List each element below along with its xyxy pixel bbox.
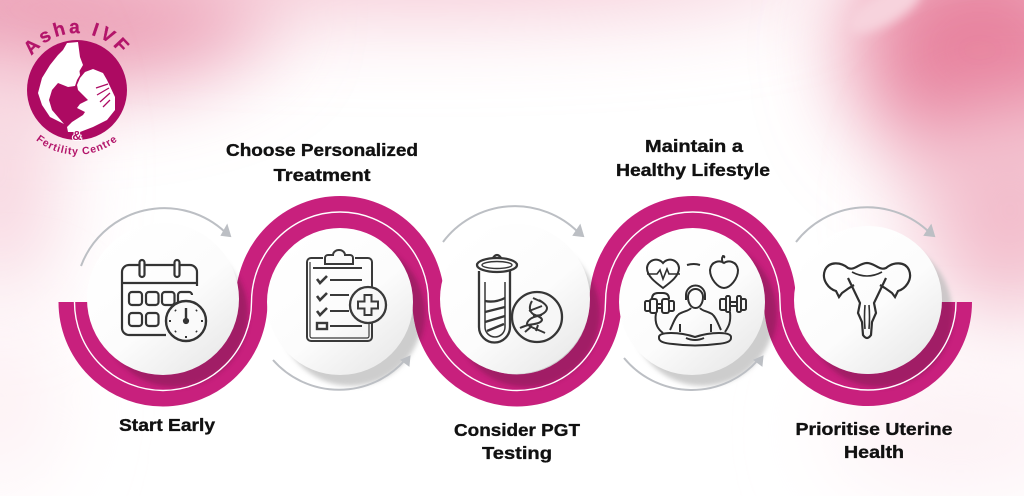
heading: maintain a healthy lifestyle: Maintain a <box>645 136 743 156</box>
heading: choose personalized treatment: Treatment <box>274 165 371 185</box>
heading: maintain a healthy lifestyle: Healthy Lifestyle <box>616 160 770 180</box>
icon: wellness person, heart, apple, dumbbells <box>645 256 746 346</box>
arrow: step 2 <box>273 356 410 390</box>
heading: choose personalized treatment <box>226 140 418 185</box>
logo baby silhouette <box>67 69 115 132</box>
step 4 circle: healthy lifestyle <box>619 229 765 375</box>
logo: Asha IVF Fertility Centre: Asha IVF <box>26 22 130 56</box>
heading: start early: Start Early <box>119 415 215 435</box>
step 5 circle: uterine health <box>794 226 942 374</box>
heading: consider PGT testing <box>454 420 580 463</box>
wave ribbon <box>74 212 956 390</box>
logo: Asha IVF Fertility Centre: & <box>72 128 82 143</box>
heading: consider PGT testing: Testing <box>482 443 552 463</box>
arrow: step 5 <box>796 207 934 242</box>
icon: calendar with clock <box>122 260 206 341</box>
step 2 circle: personalized treatment <box>267 229 413 375</box>
heading: prioritise uterine health: Prioritise Uterine <box>796 419 953 439</box>
icon: clipboard with plus <box>307 250 386 341</box>
step 1 circle: start early <box>87 223 239 375</box>
icon: test tube and DNA <box>477 255 562 342</box>
circle drop shadows on background <box>101 240 952 386</box>
logo mother silhouette <box>38 42 83 124</box>
arrow: step 1 <box>81 208 230 266</box>
arrow: step 4 <box>624 356 763 390</box>
heading: choose personalized treatment: Choose Personalized <box>226 140 418 160</box>
arrow: step 3 <box>443 206 583 242</box>
heading: prioritise uterine health: Health <box>844 442 904 462</box>
logo: Asha IVF Fertility Centre: Fertility Centre <box>36 134 116 157</box>
heading: consider PGT testing: Consider PGT <box>454 420 580 440</box>
logo: Asha IVF Fertility Centre <box>26 22 130 157</box>
heading: prioritise uterine health <box>796 419 953 462</box>
heading: maintain a healthy lifestyle <box>616 136 770 180</box>
step 3 circle: PGT testing <box>440 224 590 374</box>
icon: uterus <box>824 263 910 338</box>
